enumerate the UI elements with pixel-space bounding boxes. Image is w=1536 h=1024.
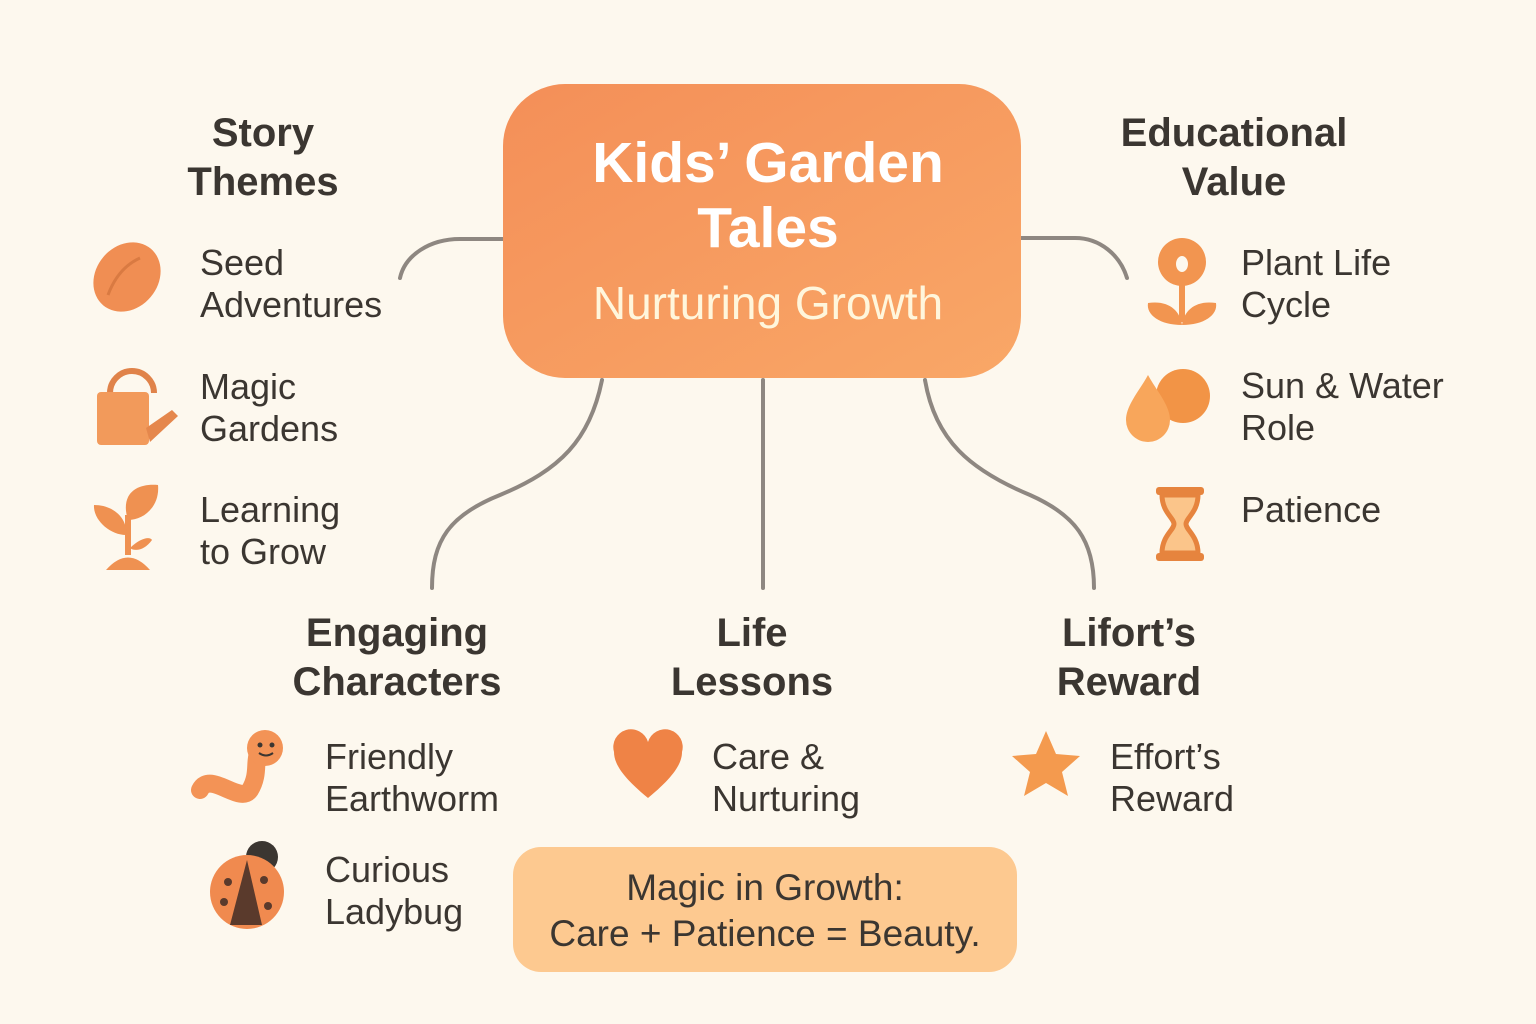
- text: learning to grow: to Grow: [200, 531, 326, 572]
- text: magic gardens: [200, 366, 338, 449]
- heading: educational value: Value: [1182, 160, 1286, 204]
- icon: sun and water: [1126, 369, 1210, 442]
- title: [592, 131, 944, 260]
- callout text: Magic in Growth:: [626, 867, 904, 908]
- icon: hourglass: [1156, 487, 1204, 561]
- heading: life lessons: [671, 611, 833, 704]
- heading: story themes: [187, 111, 339, 204]
- icon: earthworm: [200, 730, 283, 794]
- icon: watering can: [97, 371, 178, 445]
- heading: engaging characters: [292, 611, 502, 704]
- icon: flower: [1148, 238, 1216, 325]
- text: curious ladybug: Curious: [325, 849, 449, 890]
- heading: lifort's reward: Lifort’s: [1062, 611, 1196, 655]
- heading: story themes: Story: [212, 111, 314, 155]
- text: plant life cycle: Cycle: [1241, 284, 1331, 325]
- text: learning to grow: [200, 489, 340, 572]
- icon: ladybug: [210, 841, 284, 929]
- icon: seed: [79, 229, 175, 325]
- heading: story themes: Themes: [187, 160, 339, 204]
- text: effort's reward: [1110, 736, 1234, 819]
- callout box: [513, 847, 1017, 972]
- text: effort's reward: Reward: [1110, 778, 1234, 819]
- text: sun & water role: [1241, 365, 1444, 448]
- text: plant life cycle: [1241, 242, 1391, 325]
- heading: engaging characters: Characters: [292, 660, 502, 704]
- text: effort's reward: Effort’s: [1110, 736, 1221, 777]
- text: seed adventures: Seed: [200, 242, 284, 283]
- text: friendly earthworm: [325, 736, 499, 819]
- text: sun & water role: Role: [1241, 407, 1315, 448]
- text: friendly earthworm: Earthworm: [325, 778, 499, 819]
- icon: star: [1012, 731, 1080, 796]
- heading: lifort's reward: [1057, 611, 1201, 704]
- text: care & nurturing: Care &: [712, 736, 824, 777]
- text: seed adventures: [200, 242, 382, 325]
- central box: [503, 84, 1021, 378]
- text: sun & water role: Sun & Water: [1241, 365, 1444, 406]
- heading: life lessons: Life: [716, 611, 788, 655]
- callout text: Care + Patience = Beauty.: [549, 913, 981, 954]
- icon: sprout: [94, 485, 158, 570]
- heading: lifort's reward: Reward: [1057, 660, 1201, 704]
- text: plant life cycle: Plant Life: [1241, 242, 1391, 283]
- connectors: [400, 238, 1127, 588]
- title: Kids’ Garden: [592, 131, 944, 195]
- text: care & nurturing: Nurturing: [712, 778, 860, 819]
- text: learning to grow: Learning: [200, 489, 340, 530]
- text: magic gardens: Gardens: [200, 408, 338, 449]
- text: curious ladybug: [325, 849, 463, 932]
- text: patience: Patience: [1241, 489, 1381, 530]
- subtitle: Nurturing Growth: [593, 277, 943, 329]
- text: seed adventures: Adventures: [200, 284, 382, 325]
- heading: life lessons: Lessons: [671, 660, 833, 704]
- callout text: [549, 867, 981, 954]
- text: curious ladybug: Ladybug: [325, 891, 463, 932]
- text: care & nurturing: [712, 736, 860, 819]
- heading: educational value: Educational: [1121, 111, 1347, 155]
- icon: heart: [613, 729, 683, 798]
- title: Tales: [697, 196, 839, 260]
- text: magic gardens: Magic: [200, 366, 296, 407]
- heading: engaging characters: Engaging: [306, 611, 488, 655]
- text: friendly earthworm: Friendly: [325, 736, 453, 777]
- heading: educational value: [1121, 111, 1347, 204]
